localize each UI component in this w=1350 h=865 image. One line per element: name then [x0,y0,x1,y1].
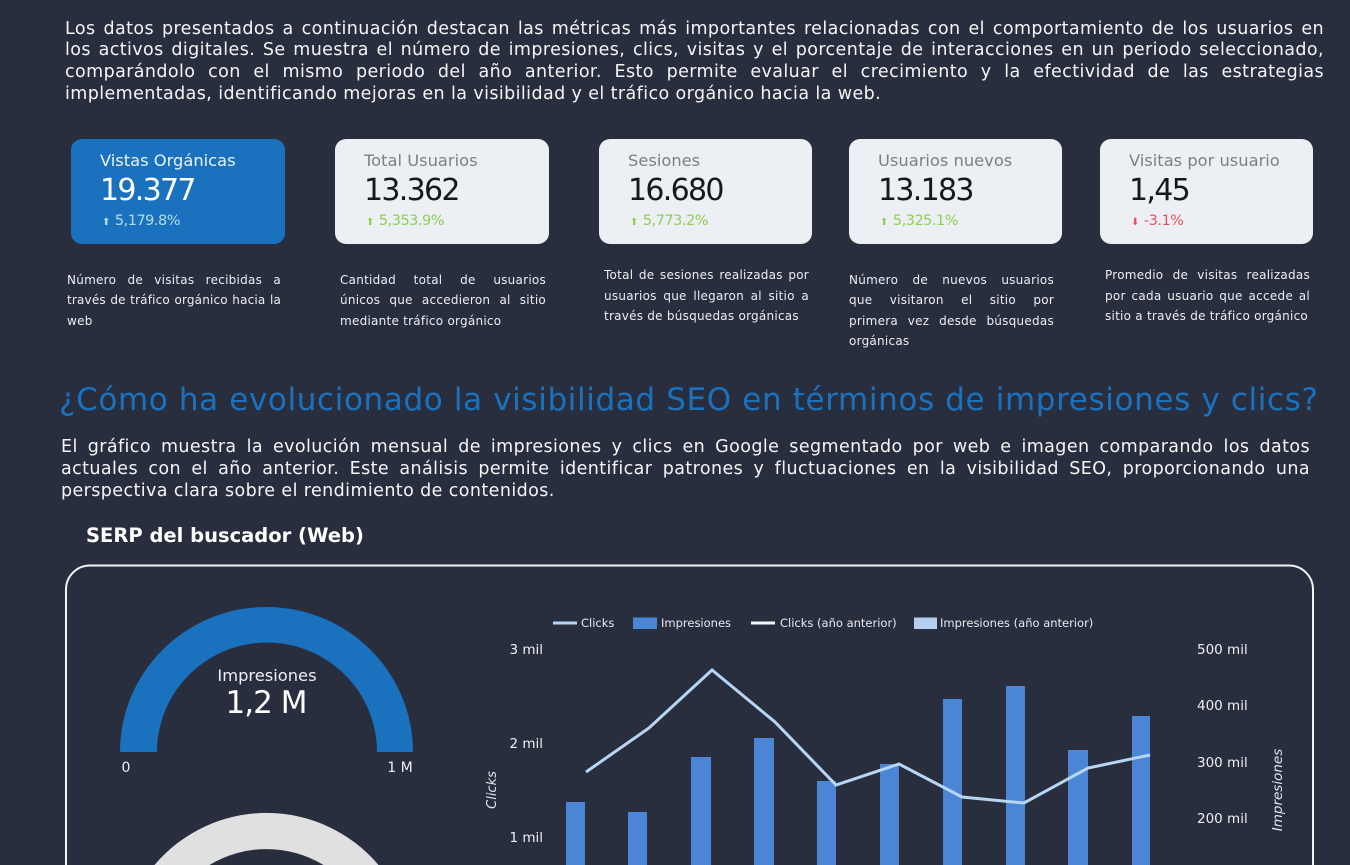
right axis: 300 mil [1197,755,1248,771]
description: Vistas Orgánicas: través de tráfico orgánico hacia la [67,293,281,307]
left axis title: Clicks [485,771,500,809]
KPI card: Visitas por usuario: Visitas por usuario [1129,150,1280,170]
description: Sesiones: usuarios que llegaron al sitio a [604,289,809,303]
description: Usuarios nuevos: primera vez desde búsquedas [849,314,1054,328]
chart legend: Clicks (año anterior) [780,616,897,630]
KPI card: Usuarios nuevos: 13.183 [878,173,973,208]
description: Total Usuarios: únicos que accedieron al sitio [340,293,546,307]
left axis: 3 mil [509,642,543,658]
description: Visitas por usuario: por cada usuario que accede al [1105,289,1310,303]
description: Usuarios nuevos: que visitaron el sitio por [849,293,1054,307]
description: Usuarios nuevos: orgánicas [849,334,909,348]
gauge: impresiones: 1 M [387,760,413,776]
chart legend: Impresiones (año anterior) [940,616,1093,630]
left axis: 2 mil [509,736,543,752]
intro text block: comparándolo con el mismo periodo del año anterior. Esto permite evaluar el crecimiento y la efectividad de las estrategias [65,62,1324,82]
gauge: impresiones: 0 [122,760,130,776]
KPI card: Visitas por usuario: 1,45 [1129,173,1189,208]
description: Vistas Orgánicas: Número de visitas recibidas a [67,273,281,287]
right axis: 200 mil [1197,811,1248,827]
gauge: clicks (grey) [154,813,378,865]
panel heading: SERP del buscador: SERP del buscador (Web) [86,524,364,547]
intro text block [65,19,1324,104]
KPI card: Visitas por usuario [1100,139,1313,244]
description: Total Usuarios: Cantidad total de usuarios [340,273,546,287]
section description text: actuales con el año anterior. Este análisis permite identificar patrones y fluctuaciones en la visibilidad SEO, proporcionando una [61,459,1310,479]
section description text [61,437,1310,501]
panel border [66,566,1313,865]
section description text: perspectiva clara sobre el rendimiento de contenidos. [61,481,555,501]
KPI card: Sesiones: ⬆ 5,773.2% [630,212,708,228]
intro text block: Los datos presentados a continuación destacan las métricas más importantes relacionadas con el comportamiento de los usuarios en [65,19,1324,39]
KPI card: Sesiones: Sesiones [628,150,700,170]
KPI card: Usuarios nuevos [849,139,1062,244]
KPI card: Total Usuarios: ⬆ 5,353.9% [366,212,444,228]
chart legend: Clicks [581,616,614,630]
line: clicks [586,670,1150,803]
right axis: 400 mil [1197,698,1248,714]
section description text: El gráfico muestra la evolución mensual de impresiones y clics en Google segmentado por web e imagen comparando los datos [61,437,1310,457]
description: Sesiones: Total de sesiones realizadas por [604,268,809,282]
KPI card: Total Usuarios: Total Usuarios [364,150,478,170]
gauge: impresiones [120,607,413,776]
KPI card: Visitas por usuario: ⬇ -3.1% [1131,212,1183,228]
description: Usuarios nuevos [849,273,1054,348]
KPI card: Sesiones: 16.680 [628,173,723,208]
description: Sesiones [604,268,809,323]
intro text block: implementadas, identificando mejoras en la visibilidad y el tráfico orgánico hacia la web. [65,84,881,104]
gauge: impresiones: 1,2 M [226,685,306,721]
left axis [509,642,543,846]
KPI card: Usuarios nuevos: Usuarios nuevos [878,150,1012,170]
description: Vistas Orgánicas: web [67,314,93,328]
right axis [1197,642,1248,827]
KPI card: Total Usuarios: 13.362 [364,173,459,208]
KPI card: Total Usuarios [335,139,549,244]
KPI card: Usuarios nuevos: ⬆ 5,325.1% [880,212,958,228]
left axis: 1 mil [509,830,543,846]
KPI card: Vistas Orgánicas: 19.377 [100,173,195,208]
KPI card: Vistas Orgánicas [71,139,285,244]
gauge: impresiones: Impresiones [217,666,317,685]
chart legend: Impresiones [661,616,731,630]
description: Total Usuarios [340,273,546,328]
description: Visitas por usuario: Promedio de visitas realizadas [1105,268,1310,282]
intro text block: los activos digitales. Se muestra el número de impresiones, clics, visitas y el porcentaje de interacciones en un periodo seleccionado, [65,40,1324,60]
description: Vistas Orgánicas [67,273,281,328]
KPI card: Vistas Orgánicas: ⬆ 5,179.8% [102,212,180,228]
description: Visitas por usuario: sitio a través de tráfico orgánico [1105,309,1308,323]
description: Total Usuarios: mediante tráfico orgánico [340,314,501,328]
description: Visitas por usuario [1105,268,1310,323]
KPI card: Sesiones [599,139,812,244]
KPI card: Vistas Orgánicas: Vistas Orgánicas [100,150,236,170]
right axis: 500 mil [1197,642,1248,658]
description: Usuarios nuevos: Número de nuevos usuarios [849,273,1054,287]
right axis title: Impresiones [1270,749,1286,831]
description: Sesiones: través de búsquedas orgánicas [604,309,799,323]
chart legend [553,616,1093,630]
bars: impresiones [566,686,1150,865]
section heading: ¿Cómo ha evolucionado la visibilidad SEO en términos de impresiones y clics? [59,382,1319,418]
